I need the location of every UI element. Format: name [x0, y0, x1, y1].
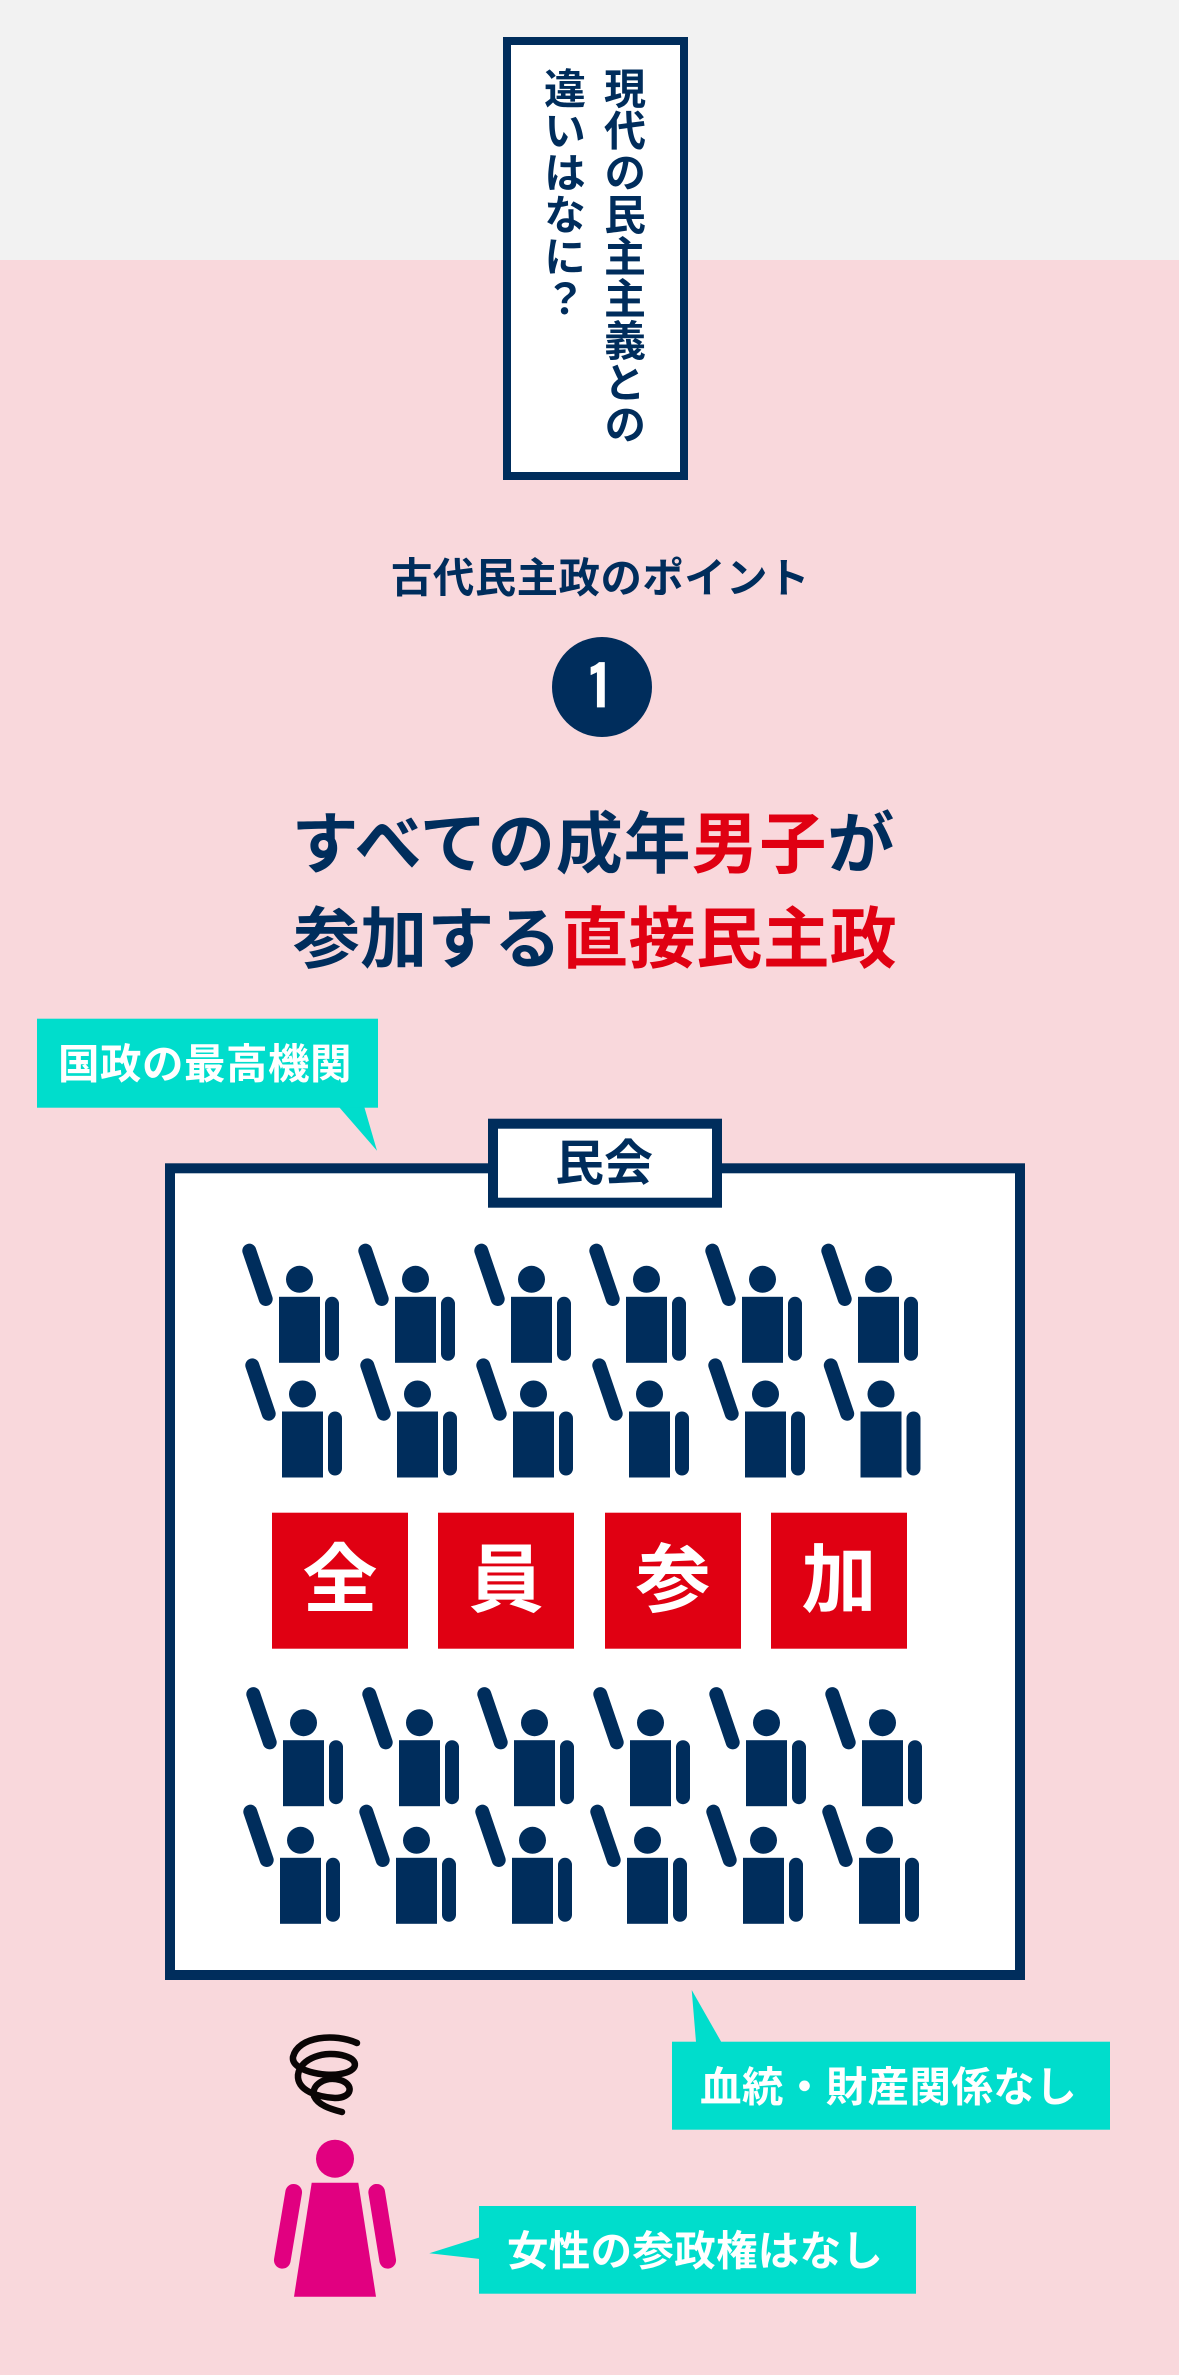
assembly name tab — [493, 1124, 717, 1203]
all-members banner — [272, 1513, 907, 1649]
icon: dizzy spiral — [293, 2037, 357, 2112]
panel: assembly — [170, 1124, 1020, 1975]
people row 3 — [253, 1694, 922, 1806]
heading — [292, 808, 897, 978]
banner block 2 — [438, 1513, 574, 1649]
banner block 1: 全 — [302, 1538, 378, 1622]
banner block 4: 加 — [801, 1538, 877, 1622]
heading line 1: すべての成年男子が — [292, 808, 895, 882]
banner block 3: 参 — [635, 1538, 711, 1622]
assembly name tab: 民会 — [555, 1137, 653, 1191]
banner block 3 — [605, 1513, 741, 1649]
subtitle: 古代民主政のポイント — [391, 556, 810, 602]
people row 2 — [252, 1365, 921, 1478]
background: grey band — [0, 0, 1179, 260]
callout: no lineage or property requirement — [672, 1990, 1110, 2130]
number badge: 1 — [585, 657, 615, 717]
callout: supreme organ of state: 国政の最高機関 — [58, 1040, 352, 1087]
people row 4 — [250, 1812, 919, 1924]
title text: line 2: 違いはなに？ — [538, 67, 586, 319]
number badge — [552, 637, 652, 737]
title text: line 1: 現代の民主主義との — [598, 67, 646, 445]
banner block 1 — [272, 1513, 408, 1649]
banner block 2: 員 — [468, 1538, 544, 1622]
icon: woman — [282, 2140, 388, 2297]
banner block 4 — [771, 1513, 907, 1649]
callout: no lineage or property requirement: 血統・財産関係なし — [700, 2064, 1077, 2111]
callout: women have no political rights: 女性の参政権はなし — [507, 2228, 883, 2275]
title box — [507, 41, 684, 476]
people row 1 — [249, 1251, 918, 1363]
callout: supreme organ of state — [37, 1019, 378, 1151]
heading line 2: 参加する直接民主政 — [293, 902, 897, 978]
callout: women have no political rights — [429, 2206, 916, 2294]
